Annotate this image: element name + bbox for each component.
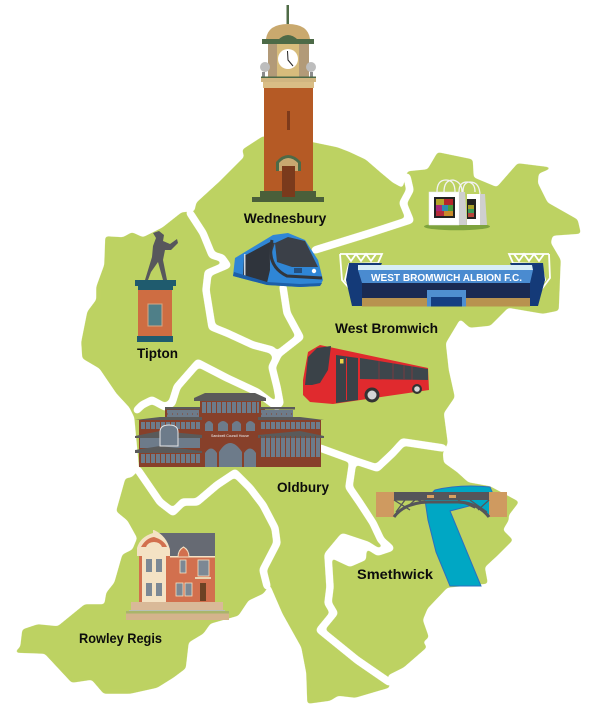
map: borough outline bbox=[16, 137, 580, 703]
icon: Tipton boxer statue bbox=[135, 231, 178, 342]
label: Tipton: Tipton bbox=[137, 346, 178, 361]
map: district borders bbox=[137, 177, 443, 682]
label: West Bromwich: West Bromwich bbox=[335, 321, 438, 336]
label: Rowley Regis: Rowley Regis bbox=[79, 631, 162, 646]
label: stadium sign: WEST BROMWICH ALBION F.C. bbox=[371, 272, 522, 284]
icon: red bus bbox=[303, 345, 429, 404]
label: Wednesbury: Wednesbury bbox=[244, 211, 327, 226]
icon: Wednesbury clock tower bbox=[252, 5, 324, 202]
label: building sign: Sandwell Council House bbox=[211, 434, 249, 438]
icon: tram bbox=[233, 233, 323, 287]
icon: Sandwell Council House bbox=[135, 393, 324, 467]
icon: Galton bridge and canal bbox=[376, 486, 507, 586]
label: Smethwick: Smethwick bbox=[357, 567, 433, 582]
icon: West Bromwich Albion stadium bbox=[340, 254, 550, 306]
icon: Rowley Regis house bbox=[126, 530, 229, 620]
label: Oldbury: Oldbury bbox=[277, 480, 329, 495]
icon: shopping bags bbox=[424, 180, 490, 230]
